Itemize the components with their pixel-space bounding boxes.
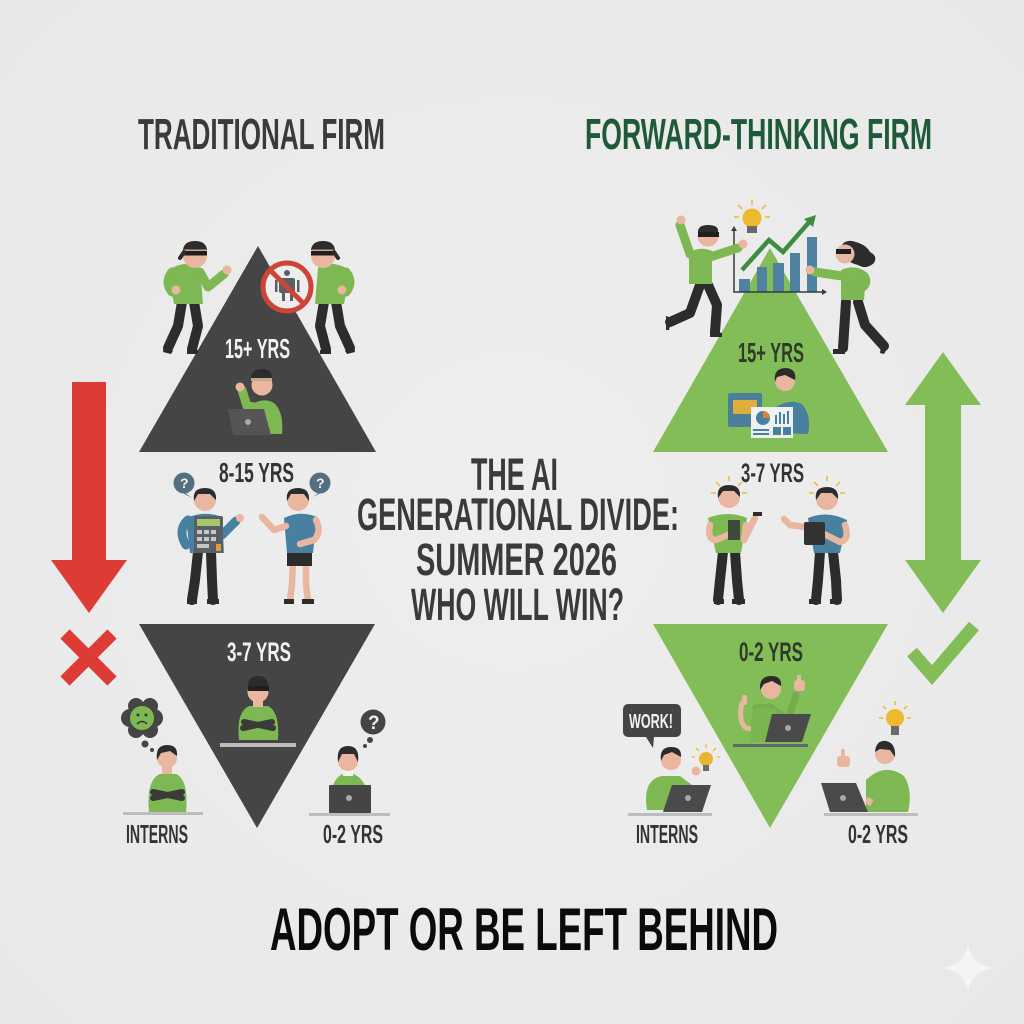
label: 3-7 yrs left: 3-7 YRS <box>227 637 291 667</box>
figure: intern with work bubble <box>623 704 720 816</box>
panel: traditional bottom triangle <box>139 624 375 828</box>
arrow: green double <box>905 352 981 613</box>
icon: sparkle <box>943 944 993 992</box>
center title: THE AI <box>471 449 558 500</box>
center title: SUMMER 2026 <box>416 534 617 585</box>
icon: question thought bubble: ? <box>368 713 380 734</box>
figure: confused man in shorts <box>262 472 330 604</box>
figure: confused man with calculator <box>174 472 244 604</box>
figure: man with tablet blue <box>784 476 847 604</box>
panel: forward-thinking bottom triangle <box>653 624 888 828</box>
figure: mid-level with crossed arms <box>220 676 296 747</box>
center title <box>357 449 679 630</box>
icon: lightbulb small <box>692 744 720 771</box>
label: 0-2 yrs center right: 0-2 YRS <box>739 637 803 667</box>
label: 15+ yrs right: 15+ YRS <box>738 337 804 368</box>
chart: growth bars <box>731 215 827 295</box>
label: 15+ yrs left: 15+ YRS <box>225 333 290 364</box>
figure: man with tablet green <box>708 476 762 604</box>
icon: red cross <box>65 634 112 681</box>
figure: unhappy intern <box>121 698 203 815</box>
label: interns right: INTERNS <box>636 819 698 849</box>
icon: lightbulb right <box>879 701 911 735</box>
figure: running woman <box>806 241 889 354</box>
figure: junior with question <box>309 710 390 816</box>
figure: traditional senior right <box>311 241 355 354</box>
label: 0-2 yrs right: 0-2 YRS <box>848 819 908 849</box>
heading: traditional firm: TRADITIONAL FIRM <box>138 110 385 159</box>
icon: question bubble left: ? <box>180 475 189 491</box>
icon: question bubble right: ? <box>316 475 325 491</box>
panel: traditional top triangle <box>139 246 376 452</box>
label: interns left: INTERNS <box>126 819 188 849</box>
arrow: red down <box>51 382 127 613</box>
figure: senior with dashboards <box>728 368 809 438</box>
figure: junior with laptop and bulb <box>821 701 918 816</box>
panel: forward-thinking top triangle <box>653 248 888 452</box>
figure: jumping man <box>666 216 748 337</box>
center title: GENERATIONAL DIVIDE: <box>357 489 679 540</box>
icon: green check <box>912 626 974 675</box>
center title: WHO WILL WIN? <box>411 579 624 630</box>
icon: thumbs up <box>837 749 850 767</box>
label: 3-7 yrs center right: 3-7 YRS <box>741 458 804 488</box>
icon: lightbulb top <box>734 200 770 233</box>
figure: thumbs up with laptop <box>733 675 811 747</box>
label: 0-2 yrs left: 0-2 YRS <box>323 819 383 849</box>
callout: work: WORK! <box>629 711 673 733</box>
icon: sad thought cloud <box>121 698 163 752</box>
label: 8-15 yrs: 8-15 YRS <box>219 457 294 488</box>
figure: senior at laptop <box>228 369 282 435</box>
figure: traditional senior left <box>163 241 232 354</box>
icon: no robots sign <box>263 263 311 311</box>
